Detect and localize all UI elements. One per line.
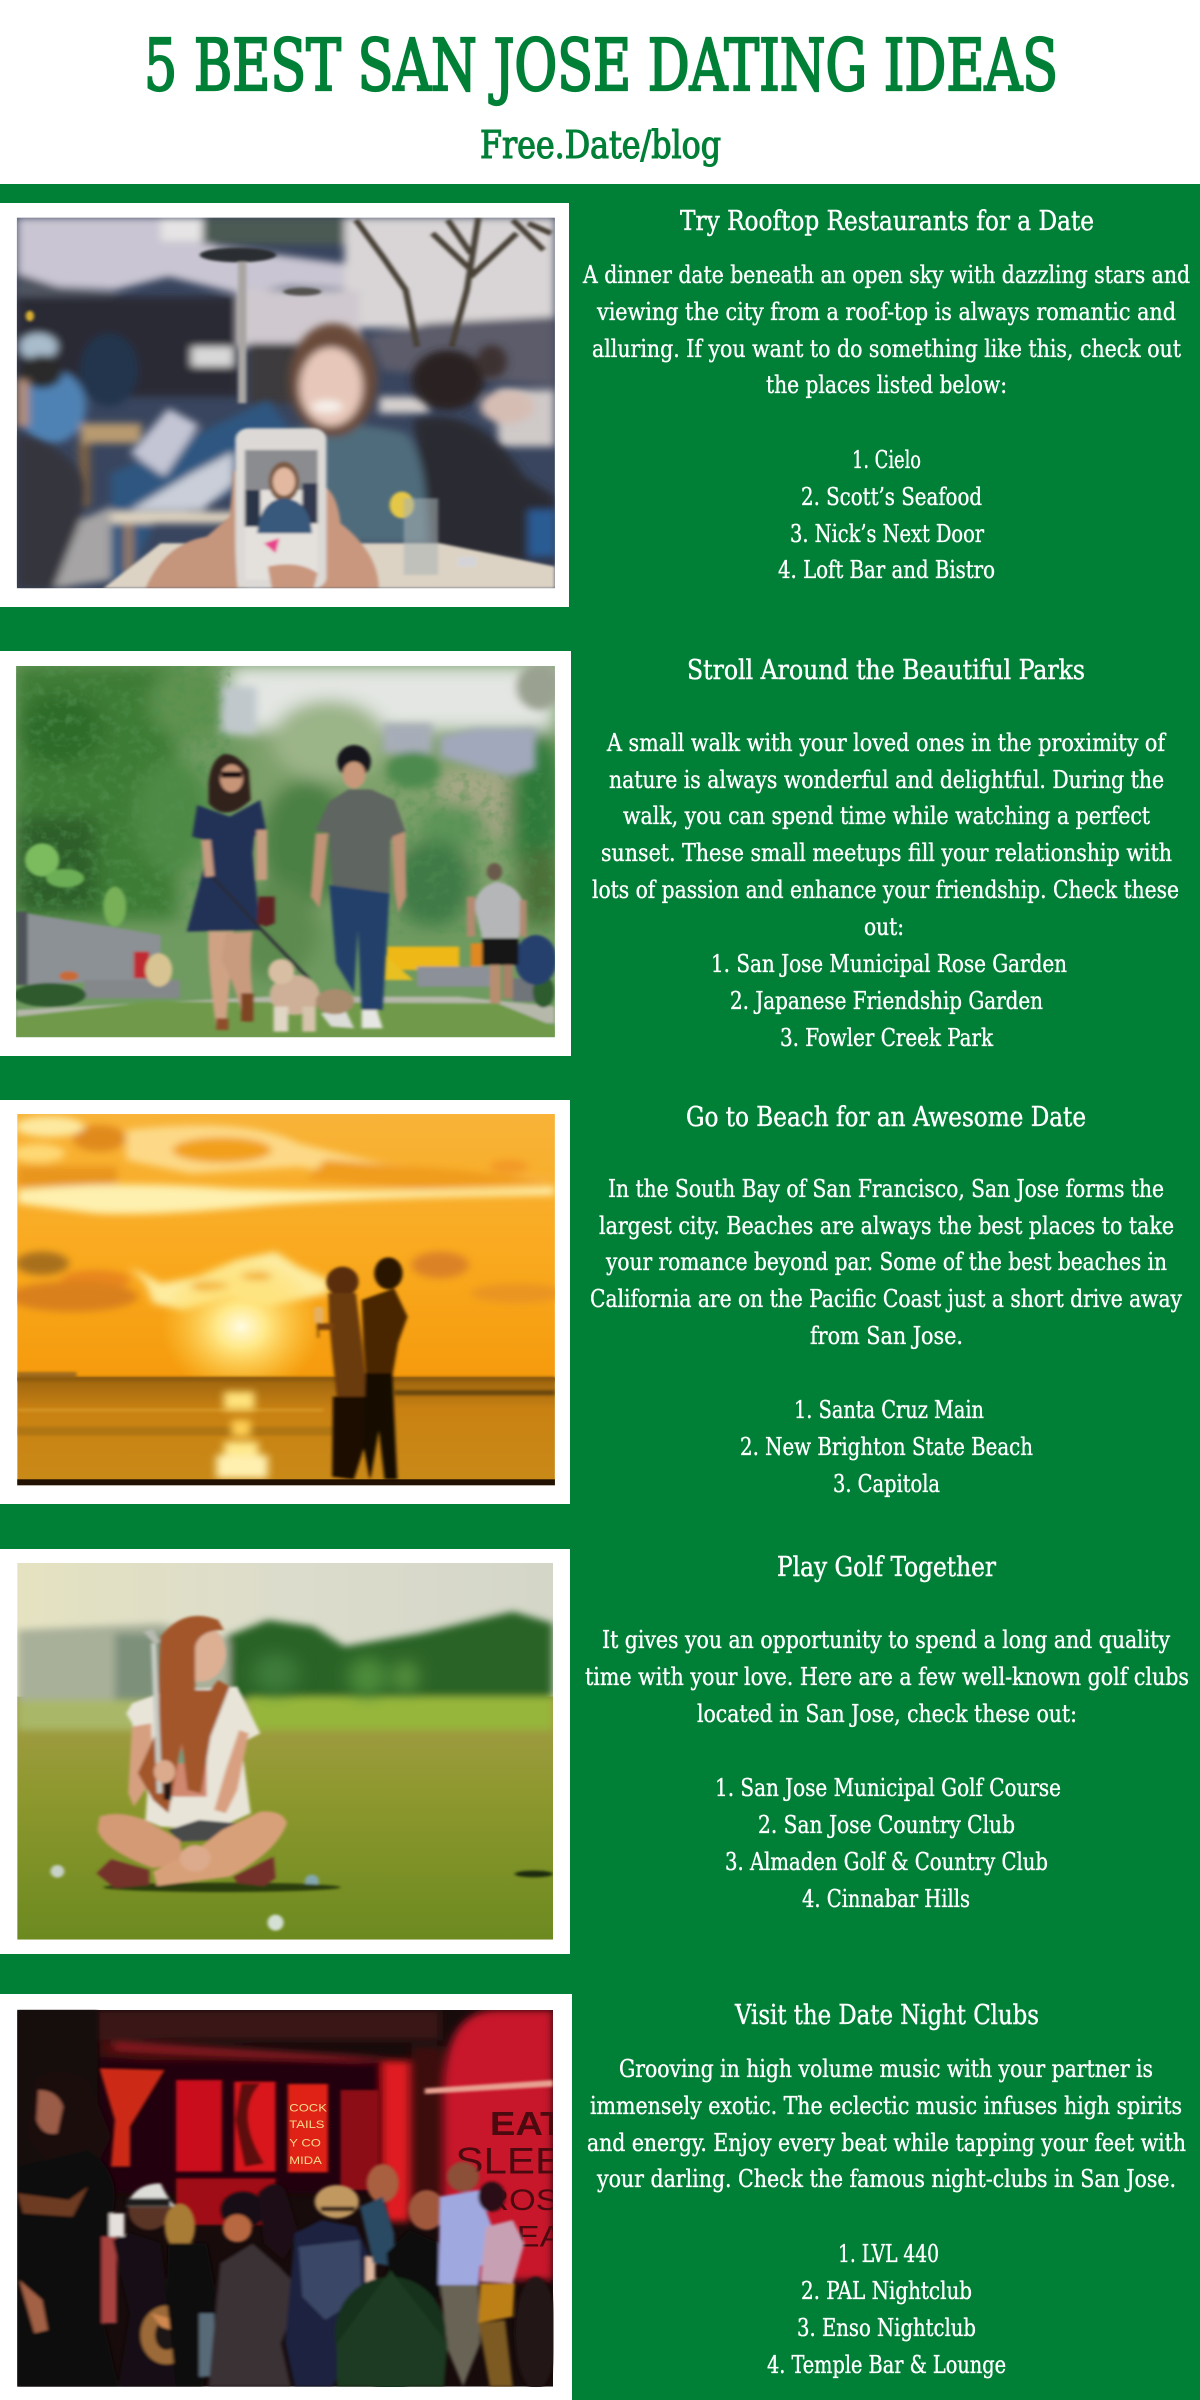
text: night clubs: [587, 2000, 1186, 2379]
text: golf: [585, 1552, 1189, 1913]
panel: rooftop restaurants photo card: [0, 203, 569, 607]
paragraph: out:: [864, 913, 904, 941]
heading: Visit the Date Night Clubs: [734, 2000, 1039, 2031]
heading: Go to Beach for an Awesome Date: [686, 1102, 1086, 1133]
list of places: [711, 950, 1067, 1052]
header band: [0, 0, 1200, 184]
paragraph: viewing the city from a roof-top is always romantic and: [596, 298, 1176, 326]
list of places: 3. Enso Nightclub: [797, 2314, 976, 2342]
wall lettering: EA: [517, 2220, 563, 2253]
list of places: 4. Temple Bar & Lounge: [767, 2351, 1006, 2379]
text: beach: [590, 1102, 1183, 1498]
wall lettering: EAT: [490, 2105, 564, 2142]
paragraph: [587, 2055, 1186, 2193]
list of places: [715, 1774, 1061, 1913]
paragraph: [582, 261, 1190, 399]
paragraph: the places listed below:: [766, 371, 1007, 399]
panel: golf photo card: [0, 1549, 570, 1954]
paragraph: from San Jose.: [810, 1322, 963, 1350]
paragraph: immensely exotic. The eclectic music infuses high spirits: [590, 2092, 1182, 2120]
photo: girl sitting on golf green: [17, 1563, 553, 1940]
list of places: 3. Fowler Creek Park: [780, 1024, 994, 1052]
list of places: 4. Loft Bar and Bistro: [778, 556, 995, 584]
list of places: 2. PAL Nightclub: [801, 2277, 972, 2305]
paragraph: alluring. If you want to do something like this, check out: [592, 335, 1181, 363]
list of places: [740, 1396, 1033, 1498]
paragraph: [590, 1175, 1183, 1350]
paragraph: sunset. These small meetups fill your relationship with: [601, 839, 1172, 867]
paragraph: nature is always wonderful and delightful. During the: [609, 766, 1164, 794]
paragraph: your romance beyond par. Some of the best beaches in: [605, 1248, 1167, 1276]
list of places: 1. Santa Cruz Main: [794, 1396, 984, 1424]
paragraph: time with your love. Here are a few well-known golf clubs: [585, 1663, 1189, 1691]
heading: Stroll Around the Beautiful Parks: [687, 655, 1085, 686]
wall lettering: SLEEP: [455, 2141, 591, 2182]
list of places: 3. Capitola: [833, 1470, 940, 1498]
paragraph: largest city. Beaches are always the best places to take: [599, 1212, 1174, 1240]
list of places: 2. San Jose Country Club: [758, 1811, 1015, 1839]
list of places: 2. Scott’s Seafood: [801, 483, 982, 511]
paragraph: [592, 729, 1179, 941]
list of places: 4. Cinnabar Hills: [802, 1885, 970, 1913]
list of places: 2. New Brighton State Beach: [740, 1433, 1033, 1461]
neon sign: MIDA: [289, 2154, 323, 2167]
neon sign: COCK: [289, 2101, 327, 2114]
panel: parks photo card: [0, 651, 571, 1056]
list of places: 1. Cielo: [852, 446, 921, 474]
panel: night clubs photo card: [0, 1994, 591, 2400]
heading: Play Golf Together: [777, 1552, 996, 1583]
paragraph: Grooving in high volume music with your partner is: [619, 2055, 1153, 2083]
photo: rooftop restaurant selfie: [17, 218, 555, 588]
list of places: 1. San Jose Municipal Golf Course: [715, 1774, 1061, 1802]
paragraph: walk, you can spend time while watching a perfect: [623, 802, 1150, 830]
text: rooftop restaurants: [582, 206, 1190, 584]
silhouette: [314, 1257, 408, 1479]
panel: beach photo card: [0, 1100, 570, 1504]
list of places: 2. Japanese Friendship Garden: [730, 987, 1043, 1015]
list of places: 1. San Jose Municipal Rose Garden: [711, 950, 1067, 978]
subtitle: Free.Date/blog: [480, 123, 721, 167]
paragraph: located in San Jose, check these out:: [697, 1700, 1077, 1728]
photo: crowd at red night club: [17, 2010, 591, 2390]
wall lettering: ROS: [484, 2183, 559, 2216]
paragraph: In the South Bay of San Francisco, San Jose forms the: [608, 1175, 1164, 1203]
wall lettering: [458, 2112, 553, 2246]
paragraph: A small walk with your loved ones in the proximity of: [606, 729, 1167, 757]
list of places: 3. Nick’s Next Door: [790, 520, 985, 548]
photo: couple at beach sunset: [8, 1114, 563, 1485]
paragraph: [585, 1626, 1189, 1728]
paragraph: your darling. Check the famous night-clubs in San Jose.: [596, 2165, 1176, 2193]
list of places: 3. Almaden Golf & Country Club: [725, 1848, 1048, 1876]
list of places: [767, 2240, 1006, 2379]
paragraph: It gives you an opportunity to spend a long and quality: [602, 1626, 1171, 1654]
neon sign: Y CO: [289, 2136, 321, 2149]
photo: couple walking dog in park: [13, 663, 563, 1037]
neon sign: [289, 2101, 327, 2167]
list of places: 1. LVL 440: [838, 2240, 939, 2268]
list of places: [778, 446, 995, 584]
paragraph: lots of passion and enhance your friendship. Check these: [592, 876, 1179, 904]
neon sign: TAILS: [289, 2118, 324, 2131]
heading: Try Rooftop Restaurants for a Date: [680, 206, 1094, 237]
text: parks: [592, 655, 1179, 1052]
